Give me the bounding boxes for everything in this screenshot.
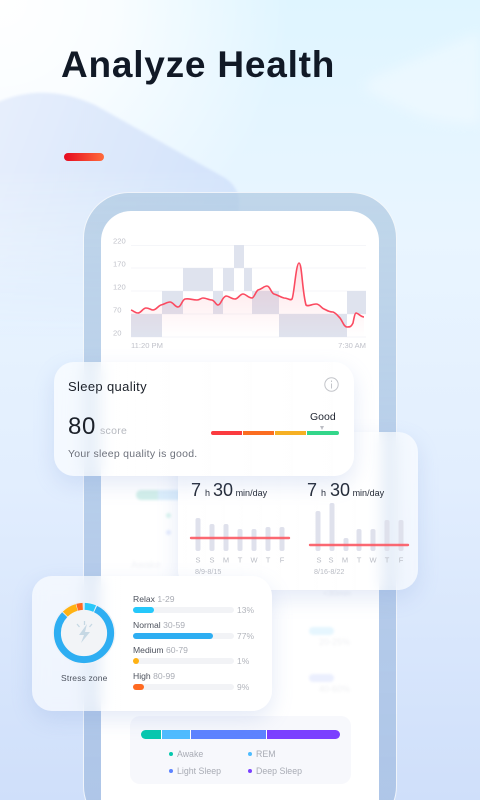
marker bbox=[320, 426, 324, 430]
weekly bar charts: M bbox=[342, 556, 348, 564]
panel: sleep stages legend bbox=[130, 716, 351, 784]
row: medium bbox=[133, 645, 249, 666]
weekly bar charts: S bbox=[209, 556, 215, 564]
faded background content in phone bbox=[131, 489, 351, 694]
sleep heart rate chart: 120 bbox=[113, 282, 126, 292]
icon: info bbox=[324, 377, 339, 392]
weekly bar charts: W bbox=[250, 556, 258, 564]
week 1 duration: 7 h30 min/day bbox=[191, 480, 267, 500]
row: medium: Medium 60-79 bbox=[133, 645, 188, 655]
weekly bar charts: T bbox=[357, 556, 362, 564]
donut label: Stress zone bbox=[61, 673, 108, 683]
row: normal bbox=[133, 620, 254, 641]
week 2 duration: 7 h30 min/day bbox=[307, 480, 384, 500]
row: high: High 80-99 bbox=[133, 671, 175, 681]
weekly bar charts: 8/16-8/22 bbox=[314, 567, 344, 576]
faded percent 2: 40-60% bbox=[319, 684, 350, 694]
row: relax bbox=[133, 594, 254, 615]
legend: awake: Awake bbox=[177, 749, 203, 759]
sleep heart rate chart bbox=[113, 236, 366, 350]
sleep heart rate chart: 20 bbox=[113, 328, 121, 338]
panel: weekly sleep bbox=[178, 432, 418, 590]
faded percent 1: 20-25% bbox=[319, 637, 350, 647]
faded legend dots bbox=[166, 513, 171, 518]
panel: stress zone bbox=[32, 576, 272, 711]
faded range: <30min bbox=[323, 588, 351, 598]
score unit: score bbox=[100, 425, 127, 437]
weekly bar charts: S bbox=[195, 556, 201, 564]
red accent bar bbox=[64, 153, 104, 161]
faded progress 2 bbox=[309, 674, 334, 682]
row: high: 9% bbox=[237, 682, 249, 692]
heading: Sleep quality bbox=[68, 379, 147, 394]
weekly bar charts: S bbox=[316, 556, 322, 564]
weekly bar charts: W bbox=[369, 556, 377, 564]
row: normal: Normal 30-59 bbox=[133, 620, 185, 630]
stacked sleep stage bar bbox=[141, 730, 340, 739]
row: normal: 77% bbox=[237, 631, 254, 641]
panel: sleep quality bbox=[54, 362, 354, 476]
good label: Good bbox=[310, 411, 336, 423]
weekly bar charts: M bbox=[223, 556, 229, 564]
weekly bar charts: T bbox=[385, 556, 390, 564]
faded progress 1 bbox=[309, 627, 334, 635]
row: medium: 1% bbox=[237, 656, 249, 666]
phone frame bbox=[83, 192, 397, 800]
faded label: Awake bbox=[131, 560, 161, 571]
sleep heart rate chart: 7:30 AM bbox=[338, 341, 366, 350]
weekly bar charts: T bbox=[266, 556, 271, 564]
row: relax: Relax 1-29 bbox=[133, 594, 175, 604]
faded stacked bar bbox=[136, 490, 158, 500]
sleep heart rate chart: 220 bbox=[113, 236, 126, 246]
score: 80 bbox=[68, 413, 96, 440]
sleep heart rate chart: 11:20 PM bbox=[131, 341, 163, 350]
phone screen bbox=[101, 211, 379, 800]
weekly bar charts: F bbox=[399, 556, 404, 564]
weekly bar charts: T bbox=[238, 556, 243, 564]
sleep heart rate chart: 170 bbox=[113, 260, 126, 268]
description: Your sleep quality is good. bbox=[68, 448, 198, 460]
weekly bar charts bbox=[190, 503, 410, 576]
row: relax: 13% bbox=[237, 605, 254, 615]
row: high bbox=[133, 671, 249, 692]
weekly bar charts: F bbox=[280, 556, 285, 564]
legend: deep sleep: Deep Sleep bbox=[256, 766, 302, 776]
legend: light sleep: Light Sleep bbox=[177, 766, 221, 776]
title: Analyze Health bbox=[61, 44, 335, 85]
legend: rem: REM bbox=[256, 749, 276, 759]
stress donut bbox=[54, 602, 116, 664]
weekly bar charts: 8/9-8/15 bbox=[195, 567, 221, 576]
rating bar bbox=[211, 431, 339, 435]
weekly bar charts: S bbox=[328, 556, 334, 564]
sleep heart rate chart: 70 bbox=[113, 306, 121, 314]
